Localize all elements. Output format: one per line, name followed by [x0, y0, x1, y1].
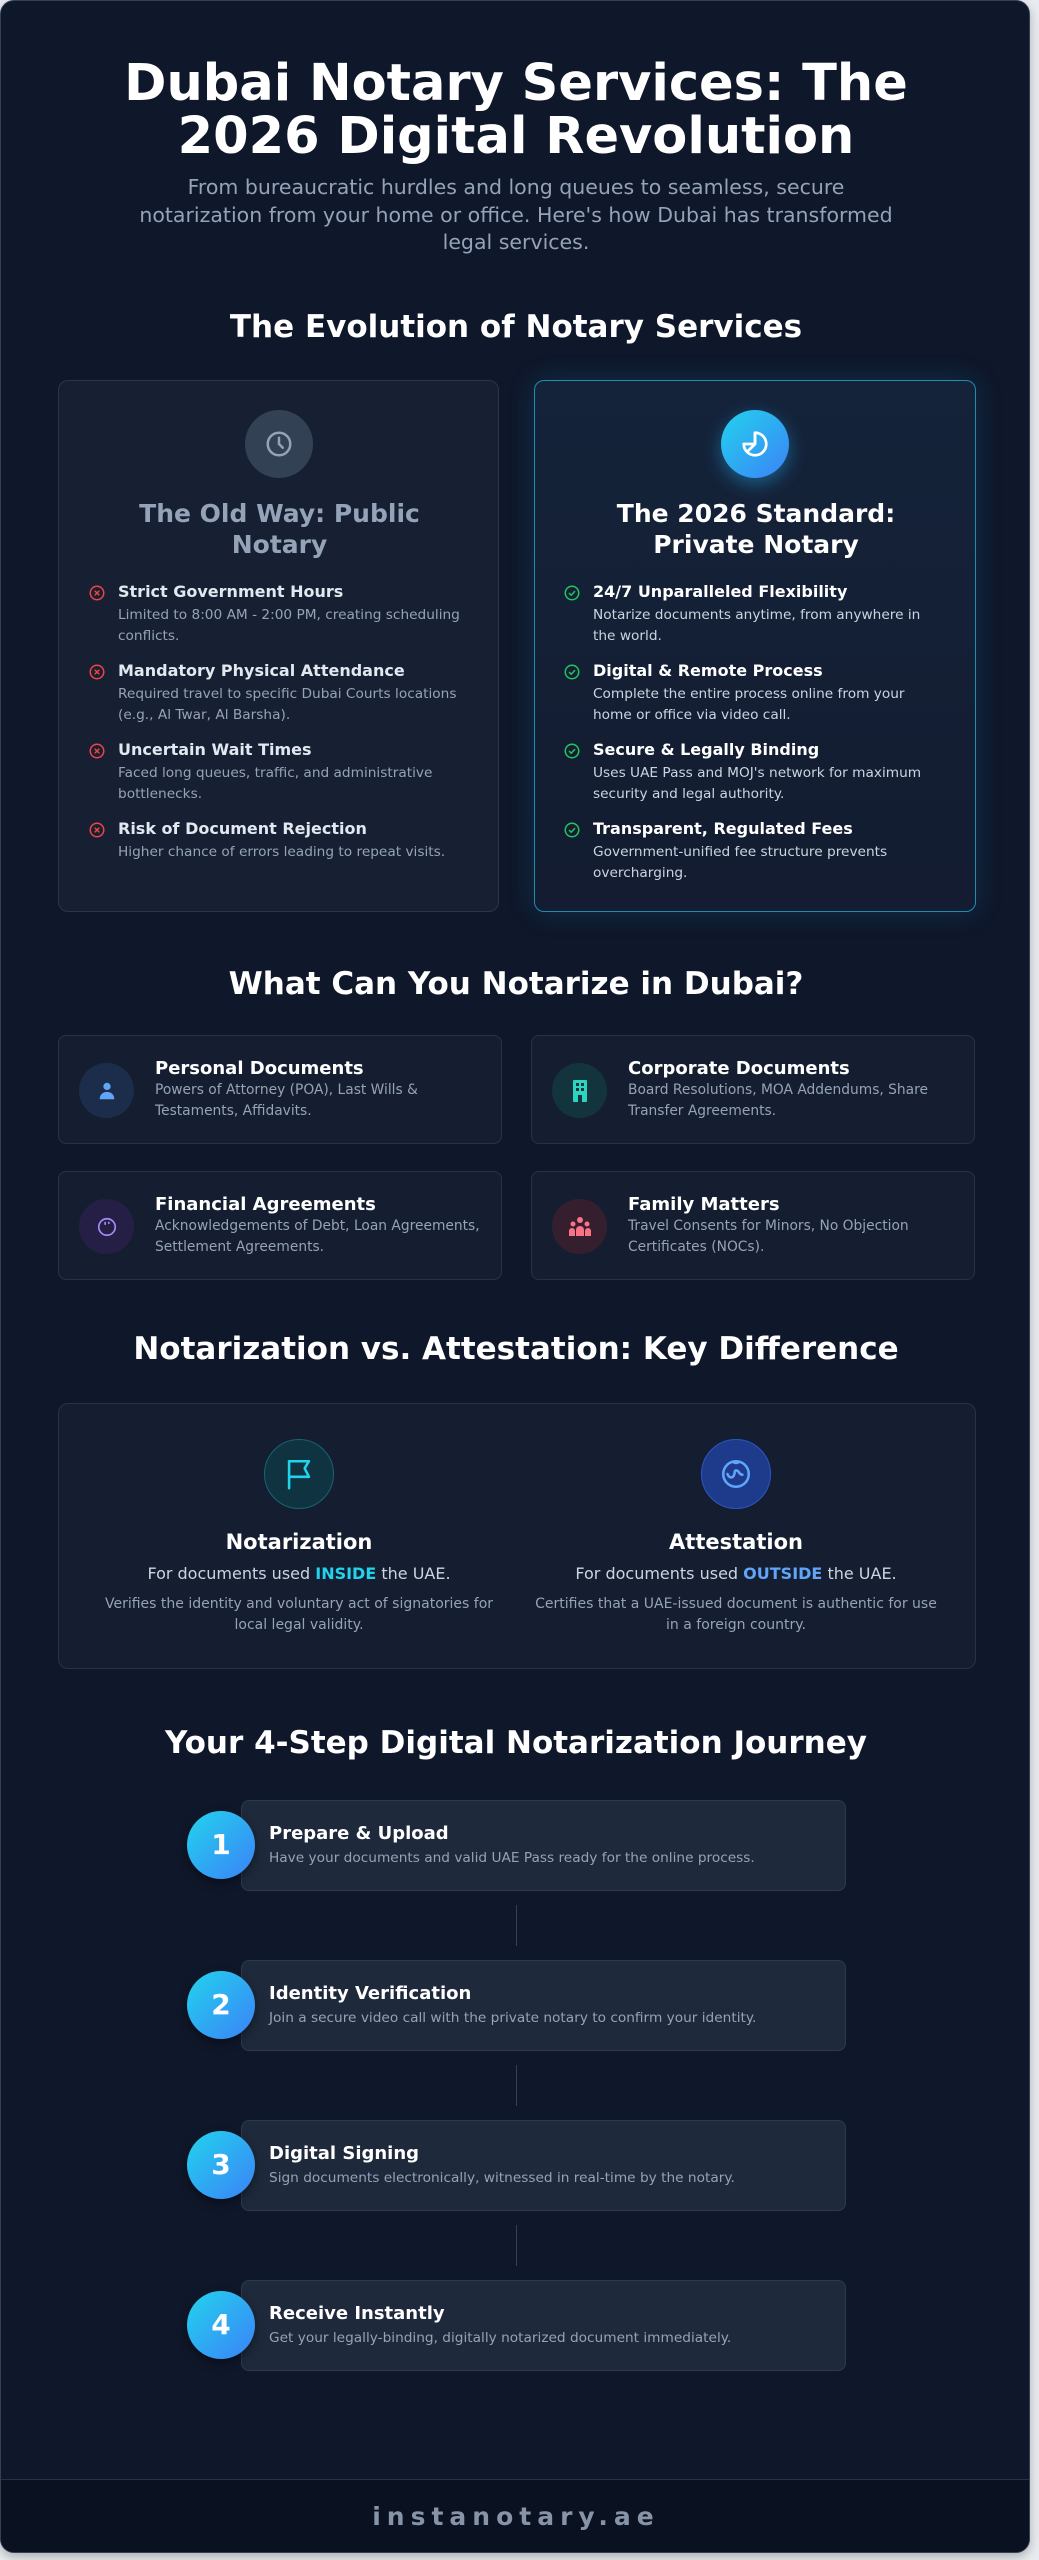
column: notarization: For documents used INSIDE the UAE. [147, 1564, 451, 1583]
item: fees: Government-unified fee structure prevents [593, 844, 887, 860]
title: 2026 Digital Revolution [178, 107, 854, 166]
item: secure [564, 740, 921, 802]
step 3: 3 [211, 2148, 231, 2181]
list: old way items [90, 582, 460, 860]
new title: The 2026 Standard: [617, 499, 895, 528]
card: family: Family Matters [628, 1194, 780, 1215]
card: family: Travel Consents for Minors, No Objection [628, 1218, 909, 1234]
title [124, 54, 908, 166]
step 2: Identity Verification [269, 1983, 471, 2004]
subtitle [139, 175, 893, 254]
panel: old way [58, 380, 499, 912]
heading: evolution: The Evolution of Notary Services [230, 309, 802, 345]
item: hours [90, 582, 460, 644]
item: fees: Transparent, Regulated Fees [593, 819, 853, 838]
step 1: Have your documents and valid UAE Pass ready for the online process. [269, 1850, 755, 1866]
new title [616, 499, 895, 559]
column: attestation [535, 1439, 937, 1633]
panel: new standard [534, 380, 976, 912]
old title [139, 499, 420, 559]
card: financial: Settlement Agreements. [155, 1238, 324, 1254]
step 4: Get your legally-binding, digitally notarized document immediately. [269, 2330, 731, 2346]
subtitle: notarization from your home or office. Here's how Dubai has transformed [139, 202, 893, 226]
connector 2 [516, 2065, 517, 2106]
icon: people [552, 1199, 607, 1254]
column: attestation: Attestation [669, 1530, 803, 1554]
item: remote: Digital & Remote Process [593, 661, 823, 680]
panel: comparison [58, 1403, 976, 1669]
column: attestation: in a foreign country. [666, 1617, 806, 1633]
step 1: 1 [211, 1828, 231, 1861]
item: wait: Uncertain Wait Times [118, 740, 312, 759]
old title: The Old Way: Public [139, 499, 420, 528]
list: new standard items [564, 582, 921, 880]
step 3: Digital Signing [269, 2143, 419, 2164]
card: personal: Testaments, Affidavits. [155, 1102, 312, 1118]
column: notarization [105, 1439, 493, 1633]
footer [1, 2479, 1031, 2555]
new title: Private Notary [653, 530, 859, 559]
item: rejection: Risk of Document Rejection [118, 819, 367, 838]
item: fees [564, 819, 887, 880]
heading: 4-step journey: Your 4-Step Digital Notarization Journey [165, 1725, 867, 1761]
item: wait: bottlenecks. [118, 786, 202, 802]
column: notarization: Notarization [226, 1530, 372, 1554]
title: Dubai Notary Services: The [124, 54, 908, 113]
item: remote [564, 661, 905, 722]
card: personal [58, 1035, 502, 1144]
column: attestation: For documents used OUTSIDE the UAE. [575, 1564, 897, 1583]
column: notarization: Verifies the identity and voluntary act of signatories for [105, 1596, 493, 1612]
card: financial: Acknowledgements of Debt, Loan Agreements, [155, 1218, 480, 1234]
item: flexibility: Notarize documents anytime, from anywhere in [593, 607, 920, 623]
card: financial [58, 1171, 502, 1280]
item: secure: Uses UAE Pass and MOJ's network for maximum [593, 765, 921, 781]
item: flexibility: 24/7 Unparalleled Flexibility [593, 582, 847, 601]
icon: globe [701, 1439, 771, 1509]
card: corporate: Board Resolutions, MOA Addendums, Share [628, 1082, 928, 1098]
icon: building [552, 1063, 607, 1118]
item: rejection [90, 819, 445, 860]
item: attendance: Required travel to specific Dubai Courts locations [118, 686, 456, 702]
card: family: Certificates (NOCs). [628, 1238, 764, 1254]
item: attendance: (e.g., Al Twar, Al Barsha). [118, 706, 290, 722]
step 1: Prepare & Upload [269, 1823, 449, 1844]
icon: pie [721, 410, 789, 478]
step 2: Join a secure video call with the private notary to confirm your identity. [269, 2010, 756, 2026]
item: hours: Strict Government Hours [118, 582, 343, 601]
card: corporate [531, 1035, 975, 1144]
step 4: 4 [211, 2308, 231, 2341]
subtitle: From bureaucratic hurdles and long queues to seamless, secure [188, 175, 844, 199]
item: hours: Limited to 8:00 AM - 2:00 PM, creating scheduling [118, 607, 460, 623]
step 2 [187, 1960, 846, 2051]
item: attendance [90, 661, 456, 722]
step 1 [187, 1800, 846, 1891]
column: attestation: Certifies that a UAE-issued document is authentic for use [535, 1596, 937, 1612]
item: secure: security and legal authority. [593, 786, 784, 802]
card: personal: Personal Documents [155, 1058, 364, 1079]
item: fees: overcharging. [593, 864, 687, 880]
item: flexibility [564, 582, 920, 644]
step 4: Receive Instantly [269, 2303, 445, 2324]
heading: notarization vs attestation: Notarization vs. Attestation: Key Difference [133, 1331, 899, 1367]
connector 1 [516, 1905, 517, 1946]
column: notarization: local legal validity. [234, 1617, 364, 1633]
item: attendance: Mandatory Physical Attendance [118, 661, 405, 680]
icon: coin [79, 1199, 134, 1254]
item: secure: Secure & Legally Binding [593, 740, 819, 759]
card: corporate: Transfer Agreements. [628, 1102, 776, 1118]
item: flexibility: the world. [593, 628, 662, 644]
card: personal: Powers of Attorney (POA), Last Wills & [155, 1082, 418, 1098]
step 2: 2 [211, 1988, 231, 2021]
icon: clock [245, 410, 313, 478]
footer: instanotary.ae [372, 2502, 660, 2531]
card: corporate: Corporate Documents [628, 1058, 850, 1079]
subtitle: legal services. [443, 230, 589, 254]
item: remote: Complete the entire process online from your [593, 686, 905, 702]
icon: person [79, 1063, 134, 1118]
step 3 [187, 2120, 846, 2211]
connector 3 [516, 2225, 517, 2266]
heading: what can you notarize: What Can You Notarize in Dubai? [229, 966, 803, 1002]
item: wait [90, 740, 432, 802]
card: financial: Financial Agreements [155, 1194, 376, 1215]
item: wait: Faced long queues, traffic, and administrative [118, 765, 432, 781]
step 3: Sign documents electronically, witnessed in real-time by the notary. [269, 2170, 735, 2186]
item: remote: home or office via video call. [593, 706, 791, 722]
card: family [531, 1171, 975, 1280]
step 4 [187, 2280, 846, 2371]
icon: flag [264, 1439, 334, 1509]
old title: Notary [232, 530, 327, 559]
item: rejection: Higher chance of errors leading to repeat visits. [118, 844, 445, 860]
item: hours: conflicts. [118, 628, 179, 644]
